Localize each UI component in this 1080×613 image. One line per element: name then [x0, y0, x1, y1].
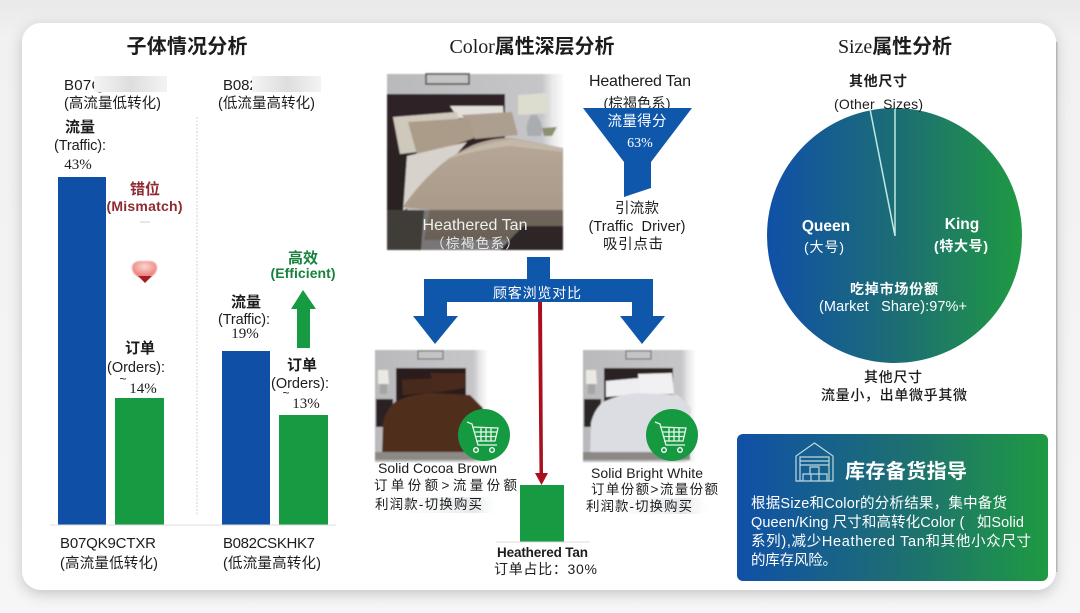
label: solid cocoa brown: Solid Cocoa Brown [378, 460, 497, 476]
arrow: red conversion [535, 302, 548, 485]
label: traffic driver: 引流款 [615, 200, 660, 217]
photo caption: Heathered Tan [422, 217, 528, 234]
label: orders 14%: ~ [119, 372, 127, 386]
label: traffic 19%: 流量 [231, 293, 261, 311]
bar: traffic 19% [222, 351, 270, 525]
label: orders 14% [107, 340, 165, 397]
label: mismatch: (Mismatch) [106, 198, 182, 214]
label: efficient: 高效 [288, 249, 318, 267]
baseline [50, 524, 336, 526]
label: heathered tan: (棕褐色系) [604, 95, 670, 111]
panel heading: 库存备货指导 [845, 459, 967, 483]
header: product one: (高流量低转化) [64, 95, 161, 112]
label: solid bright white: 利润款-切换购买 [586, 499, 692, 514]
label: traffic driver: 吸引点击 [603, 236, 663, 253]
label: traffic 43%: 流量 [65, 118, 95, 136]
label: traffic 19%: 19% [231, 326, 259, 342]
label: traffic 43%: 43% [64, 157, 92, 173]
pie label: queen [802, 218, 850, 255]
note: other sizes low: 流量小，出单微乎其微 [821, 387, 967, 403]
label: heathered tan orders 30% [494, 545, 597, 577]
label: heathered tan: Heathered Tan [589, 73, 691, 90]
pie label: market share [819, 281, 967, 315]
arrow: efficient up [291, 290, 316, 348]
label: efficient [270, 249, 336, 281]
bar: orders 14% [115, 398, 164, 525]
label: solid bright white: 订单份额>流量份额 [591, 482, 718, 497]
label: orders 13%: ~ [282, 386, 290, 400]
photo: solid bright white bedding [583, 350, 695, 462]
note: other sizes low: 其他尺寸 [864, 369, 922, 385]
axis label: product one [60, 535, 158, 572]
label: traffic 43% [54, 118, 106, 173]
flow arrow: browsing comparison: 顾客浏览对比 [493, 285, 581, 301]
header: product one [64, 76, 167, 112]
pie label: queen: Queen [802, 218, 850, 235]
label: traffic 19% [218, 293, 270, 342]
header: product one: B07QK9CTXR [64, 77, 164, 94]
bar: traffic 43% [58, 177, 106, 525]
panel body: 根据Size和Color的分析结果，集中备货 [751, 495, 1007, 512]
heading: size analysis: Size属性分析 [838, 35, 952, 58]
pie label: market share: (Market Share):97%+ [819, 299, 967, 315]
icon: warehouse [796, 443, 833, 481]
label: solid cocoa brown [374, 460, 518, 513]
label: solid bright white [586, 465, 718, 514]
icon: cart white [646, 409, 698, 461]
funnel: traffic score 63%: 流量得分 [608, 113, 666, 130]
bar: heathered tan orders [520, 485, 564, 542]
heading: variation analysis: 子体情况分析 [126, 35, 248, 58]
icon: cart cocoa [458, 409, 510, 461]
label: mismatch [106, 180, 182, 214]
label: heathered tan orders 30%: 订单占比：30% [494, 561, 597, 577]
bar chart: product one [58, 177, 164, 525]
pie chart: size share [767, 108, 1022, 363]
label: orders 13%: (Orders): [271, 376, 329, 392]
axis label: product two: B082CSKHK7 [223, 535, 315, 552]
label: efficient: (Efficient) [270, 265, 336, 281]
label: heathered tan [589, 73, 691, 111]
pie label: queen: (大号) [804, 239, 844, 255]
label: orders 13%: 13% [292, 396, 320, 412]
label: traffic 19%: (Traffic): [218, 312, 270, 328]
label: orders 14%: 订单 [125, 340, 155, 357]
pie label: king: (特大号) [934, 238, 988, 254]
label: heathered tan orders 30%: Heathered Tan [497, 545, 588, 560]
label: orders 14%: 14% [129, 381, 157, 397]
axis label: product two [223, 535, 321, 572]
funnel: traffic score 63%: 63% [627, 136, 653, 151]
label: orders 13% [271, 357, 329, 412]
label: other sizes: (Other Sizes) [834, 96, 923, 112]
panel body: Queen/King 尺寸和高转化Color ( 如Solid [751, 514, 1024, 531]
label: traffic driver [588, 200, 686, 253]
axis label: product one: B07QK9CTXR [60, 535, 156, 552]
baseline [496, 541, 590, 543]
pie label: king: King [945, 216, 979, 233]
label: mismatch: 错位 [130, 180, 160, 198]
header: product two: B082CSKHK7 [223, 77, 317, 94]
icon: red down marker [132, 222, 157, 283]
panel body: 系列),减少Heathered Tan和其他小众尺寸 [751, 533, 1031, 550]
bar: orders 13% [279, 415, 328, 525]
label: solid bright white: Solid Bright White [591, 465, 703, 481]
label: traffic 43%: (Traffic): [54, 138, 106, 154]
panel body [751, 495, 1031, 569]
label: orders 14%: (Orders): [107, 360, 165, 376]
photo caption: （棕褐色系） [431, 235, 519, 251]
photo: heathered tan bedding [387, 74, 563, 251]
header: product two: (低流量高转化) [218, 95, 315, 112]
panel body: 的库存风险。 [751, 552, 837, 569]
photo: solid cocoa brown bedding [375, 350, 487, 462]
bar chart: product two [222, 351, 328, 525]
panel: inventory guidance [737, 434, 1048, 581]
panel: variation analysis [50, 35, 336, 572]
label: traffic driver: (Traffic Driver) [588, 219, 686, 235]
dotted divider [196, 117, 198, 515]
flow arrow: browsing comparison [413, 257, 665, 344]
pie label: king [934, 216, 988, 254]
heading: color analysis: Color属性深层分析 [450, 35, 614, 58]
photo caption [422, 217, 528, 251]
label: orders 13%: 订单 [287, 357, 317, 374]
panel: color analysis [374, 35, 718, 577]
panel: size analysis [737, 35, 1048, 581]
header: product two [218, 76, 321, 112]
funnel: traffic score 63% [583, 108, 692, 197]
label: other sizes: 其他尺寸 [849, 73, 907, 89]
label: other sizes [834, 73, 923, 112]
pie label: market share: 吃掉市场份额 [850, 281, 938, 297]
axis label: product two: (低流量高转化) [223, 555, 321, 572]
note: other sizes low [821, 369, 967, 403]
label: solid cocoa brown: 利润款-切换购买 [375, 497, 482, 512]
label: solid cocoa brown: 订单份额>流量份额 [374, 478, 518, 493]
axis label: product one: (高流量低转化) [60, 555, 158, 572]
